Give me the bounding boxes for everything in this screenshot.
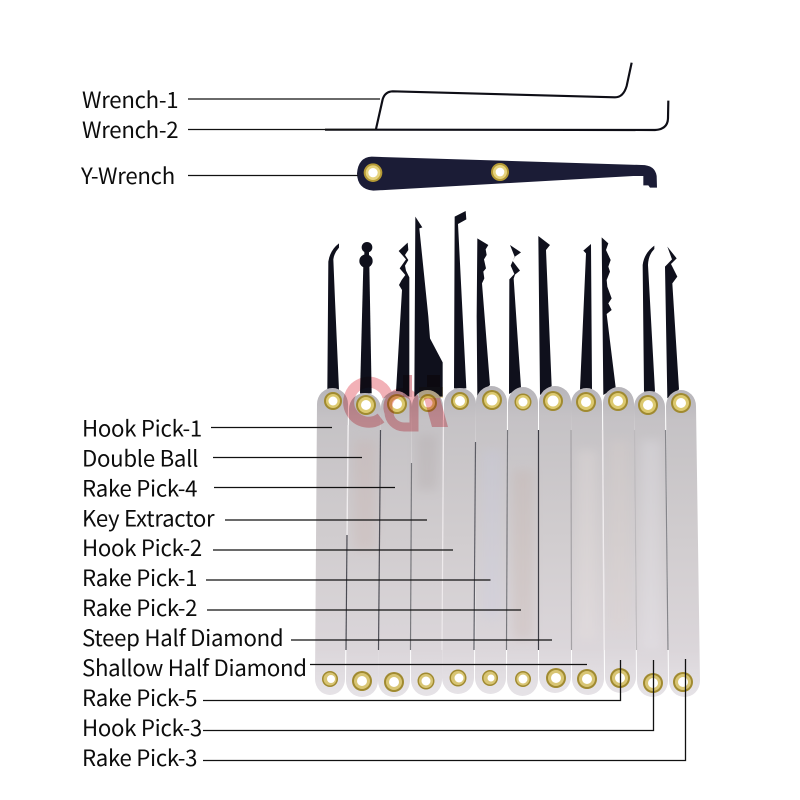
label: Shallow Half Diamond: Shallow Half Diamond (82, 651, 307, 683)
label: Hook Pick-1: Hook Pick-1 (82, 412, 202, 444)
blade: rake pick 3 (665, 247, 679, 398)
handle 2 (346, 393, 381, 697)
label: Y-Wrench: Y-Wrench (80, 159, 175, 191)
handle 7 (507, 387, 538, 696)
wrench 1 (376, 63, 632, 129)
blade: double ball (359, 242, 373, 393)
label: Wrench-2: Wrench-2 (82, 113, 178, 145)
labels (80, 83, 307, 773)
label: Hook Pick-2: Hook Pick-2 (82, 531, 202, 563)
blade: rake pick 5 (602, 237, 616, 395)
blade: rake pick 2 (509, 245, 521, 394)
brass grommets: bottom row (322, 668, 693, 693)
label: Rake Pick-2: Rake Pick-2 (82, 591, 197, 623)
label: Rake Pick-4: Rake Pick-4 (82, 472, 197, 504)
blade: hook pick 2 (454, 211, 466, 388)
handle 1 (315, 388, 348, 695)
label: Hook Pick-3: Hook Pick-3 (82, 711, 202, 743)
leader lines (188, 99, 686, 760)
label: Rake Pick-1: Rake Pick-1 (82, 561, 197, 593)
Y-wrench (357, 157, 657, 191)
handle 3 (378, 391, 412, 697)
label: Rake Pick-5: Rake Pick-5 (82, 681, 197, 713)
handle 8 (539, 386, 571, 693)
blade: key extractor (414, 217, 443, 397)
handle 12 (666, 390, 700, 697)
label: Key Extractor: Key Extractor (82, 502, 215, 534)
label: Steep Half Diamond: Steep Half Diamond (82, 621, 283, 653)
handle 5 (442, 388, 476, 694)
handle 11 (634, 391, 668, 697)
watermark logo (349, 375, 448, 427)
handle 9 (571, 388, 604, 695)
blade: shallow half diamond (580, 244, 592, 389)
handle 6 (475, 386, 507, 694)
handle 10 (603, 387, 636, 693)
brass grommets: top row (324, 390, 691, 415)
pick blades (327, 211, 679, 398)
handle 4 (411, 390, 443, 696)
blade: steep half diamond (538, 236, 552, 395)
label: Double Ball: Double Ball (82, 442, 198, 474)
label: Rake Pick-3: Rake Pick-3 (82, 741, 197, 773)
wrenches (325, 63, 668, 191)
blade: hook pick 3 (643, 246, 655, 392)
steel handles (315, 386, 700, 697)
blade: rake pick 4 (396, 243, 409, 397)
blade: rake pick 1 (477, 238, 490, 397)
blade: hook pick 1 (327, 243, 339, 390)
label: Wrench-1: Wrench-1 (82, 83, 178, 115)
wrench 2 (325, 101, 668, 130)
